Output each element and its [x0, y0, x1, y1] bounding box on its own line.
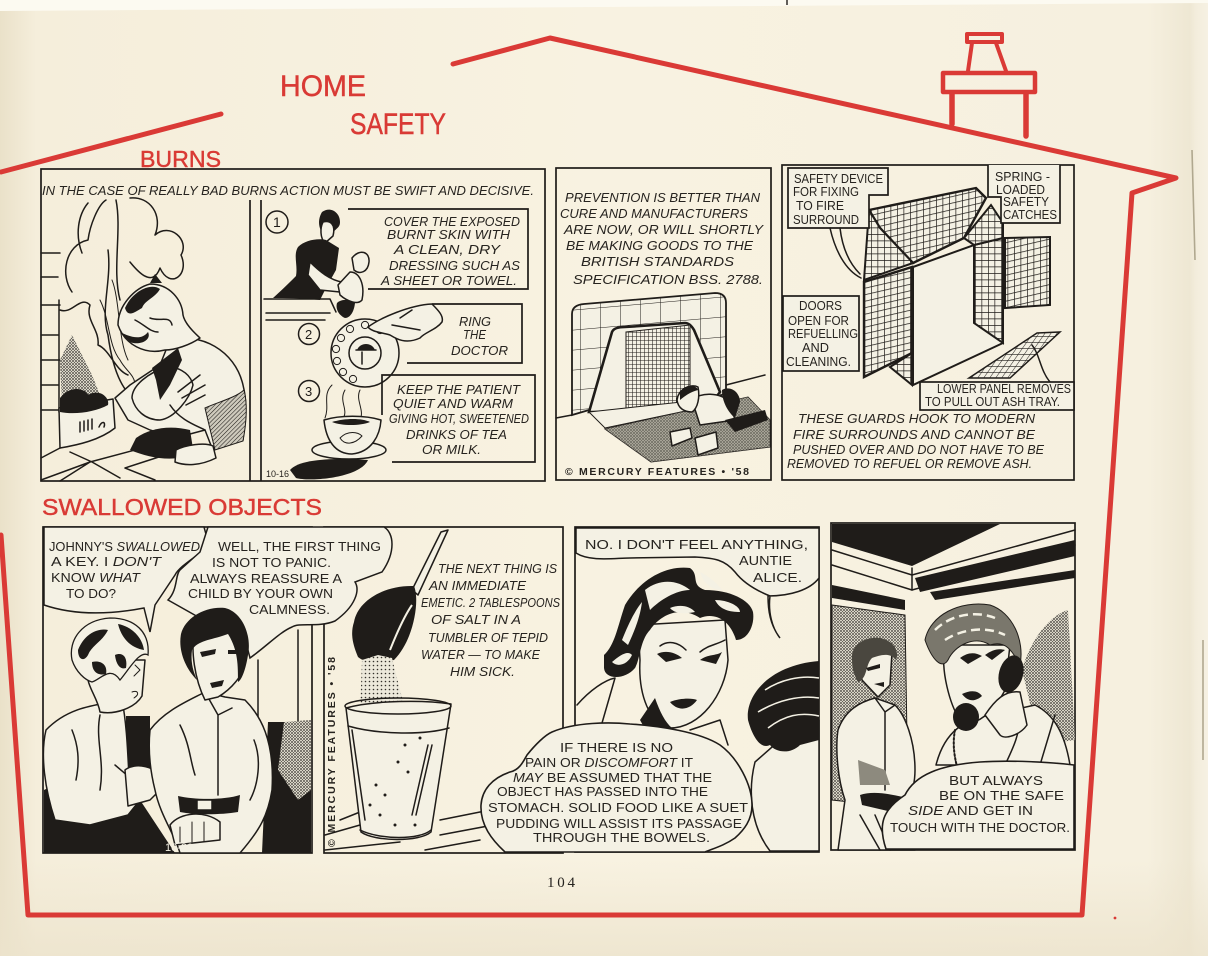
title: home safety [280, 70, 446, 141]
speech bubble: johnny's swallowed: KNOW WHAT [51, 570, 141, 585]
guard description text: FIRE SURROUNDS AND CANNOT BE [793, 427, 1035, 442]
callout: safety device [788, 168, 888, 278]
title: home safety: SAFETY [350, 108, 446, 141]
illustration: carpet and child with toy train [605, 386, 770, 462]
figure: woman with dark hair [149, 608, 272, 853]
speech bubble: well, the first thing: ALWAYS REASSURE A [190, 571, 342, 586]
text: cover the exposed skin: A CLEAN, DRY [393, 242, 502, 257]
callout: spring-loaded catches: LOADED [996, 182, 1045, 197]
speech bubble: but always be on the safe side: SIDE AND GET IN [908, 803, 1033, 818]
comic panel: two women talking [43, 527, 392, 854]
prevention text: BE MAKING GOODS TO THE [566, 238, 753, 253]
guard description text: PUSHED OVER AND DO NOT HAVE TO BE [793, 442, 1044, 457]
speech bubble: no i don't feel anything: AUNTIE [739, 553, 792, 568]
text: immediate emetic: EMETIC. 2 TABLESPOONS [421, 595, 560, 610]
number badge 2 [298, 324, 320, 344]
speech bubble: well, the first thing: IS NOT TO PANIC. [212, 555, 331, 570]
text: immediate emetic [421, 561, 560, 679]
number badge 2: 2 [305, 327, 312, 342]
callout: spring-loaded catches: SPRING - [995, 169, 1050, 184]
text: immediate emetic: WATER — TO MAKE [421, 647, 540, 662]
comic panel: woman telephoning [831, 523, 1075, 850]
callout: doors open [783, 296, 859, 371]
speech bubble: but always be on the safe side: BE ON THE SAFE [939, 788, 1064, 803]
callout: spring-loaded catches: SAFETY [1003, 194, 1049, 209]
text: immediate emetic: OF SALT IN A [431, 612, 521, 627]
number badge 3 [298, 380, 320, 402]
prevention text: PREVENTION IS BETTER THAN [565, 190, 761, 205]
callout: spring-loaded catches: CATCHES [1003, 207, 1057, 222]
illustration: spoon of salt [352, 530, 448, 662]
illustration: falling salt [360, 655, 406, 712]
text: keep the patient warm: QUIET AND WARM [393, 396, 513, 411]
prevention text: BRITISH STANDARDS [581, 254, 734, 269]
number badge 3: 3 [305, 384, 312, 399]
speech bubble: no i don't feel anything: NO. I DON'T FEEL ANYTHING, [585, 537, 808, 552]
callout: doors open: REFUELLING [788, 326, 858, 341]
text: cover the exposed skin: DRESSING SUCH AS [389, 258, 520, 273]
boy body [115, 338, 246, 448]
speech bubble: well, the first thing [168, 527, 392, 658]
text: immediate emetic: AN IMMEDIATE [428, 578, 526, 593]
copyright line vertical: © MERCURY FEATURES • '58 [326, 657, 338, 847]
figure: child seen from behind [748, 661, 819, 851]
speech bubble: johnny's swallowed: TO DO? [66, 586, 116, 601]
panel date: 10-30 [165, 842, 193, 854]
callout: doors open: CLEANING. [786, 354, 851, 369]
heading: swallowed objects: SWALLOWED OBJECTS [42, 494, 322, 520]
callout: lower panel [920, 345, 1074, 410]
text: ring the doctor [407, 304, 522, 363]
illustration: fire surround with guard [556, 293, 765, 428]
text: cover the exposed skin [348, 209, 528, 289]
text: cover the exposed skin: COVER THE EXPOSED [384, 214, 520, 229]
callout: lower panel: LOWER PANEL REMOVES [937, 381, 1071, 396]
comic panel: emetic [324, 527, 563, 853]
speech bubble: no i don't feel anything [576, 528, 819, 638]
text: keep the patient warm [382, 375, 535, 462]
figure: girl looking down [577, 568, 753, 745]
speech bubble: johnny's swallowed: A KEY. I DON'T [51, 554, 162, 569]
dark sofa background [44, 716, 311, 853]
speech bubble: if there is no pain: OBJECT HAS PASSED INTO THE [497, 784, 708, 799]
panel: fire guard diagram [782, 165, 1074, 480]
chimney [943, 34, 1035, 136]
callout: safety device: SURROUND [793, 212, 859, 227]
number badge 1: 1 [273, 214, 281, 230]
illustration: mother and baby [264, 210, 369, 320]
callout: lower panel: TO PULL OUT ASH TRAY. [925, 394, 1060, 409]
text: cover the exposed skin: A SHEET OR TOWEL. [380, 273, 517, 288]
text: ring the doctor: RING [459, 314, 491, 329]
speech bubble: if there is no pain [481, 723, 752, 852]
text: keep the patient warm: DRINKS OF TEA [406, 427, 507, 442]
boy head and hair [118, 284, 200, 351]
table streaks [325, 805, 563, 850]
speech bubble: but always be on the safe side [882, 761, 1074, 849]
panel: prevention [556, 168, 771, 480]
illustration: wire fire guard [864, 188, 1060, 385]
heading: burns: BURNS [140, 146, 221, 172]
strip date: 10-16 [266, 469, 289, 479]
copyright line: © MERCURY FEATURES • '58 [565, 466, 749, 478]
text: cover the exposed skin: BURNT SKIN WITH [387, 227, 511, 242]
speech bubble: if there is no pain: THROUGH THE BOWELS. [533, 830, 710, 845]
patterned wall [832, 605, 908, 803]
prevention text: ARE NOW, OR WILL SHORTLY [563, 222, 764, 237]
guard description text: REMOVED TO REFUEL OR REMOVE ASH. [787, 456, 1032, 471]
speech bubble: if there is no pain: PAIN OR DISCOMFORT IT [525, 755, 693, 770]
prevention text [560, 190, 764, 287]
prevention text: CURE AND MANUFACTURERS [560, 206, 748, 221]
illustration: boy burnt at the fireplace [41, 198, 246, 481]
callout: doors open: AND [802, 340, 829, 355]
illustration: tumbler of water [345, 698, 451, 840]
callout: spring-loaded catches [988, 165, 1060, 223]
text: immediate emetic: HIM SICK. [450, 664, 515, 679]
text: ring the doctor: DOCTOR [451, 343, 508, 358]
speech bubble: well, the first thing: CHILD BY YOUR OWN [188, 586, 333, 601]
speech bubble: but always be on the safe side: TOUCH WITH THE DOCTOR. [890, 820, 1070, 835]
text: immediate emetic: TUMBLER OF TEPID [428, 630, 548, 645]
room ceiling and mouldings [832, 524, 1075, 610]
callout: safety device: TO FIRE [796, 198, 844, 213]
figure: woman with curly hair [43, 618, 168, 825]
speech bubble: but always be on the safe side: BUT ALWAYS [949, 773, 1043, 788]
page number: 104 [547, 875, 576, 891]
speech bubble: if there is no pain: IF THERE IS NO [560, 740, 673, 755]
strip caption: IN THE CASE OF REALLY BAD BURNS ACTION MUST BE SWIFT AND DECISIVE. [42, 183, 534, 198]
figure: woman in background [837, 638, 915, 850]
illustration: telephone dial and hand [331, 304, 442, 387]
speech bubble: if there is no pain: PUDDING WILL ASSIST ITS PASSAGE [496, 816, 742, 831]
speech bubble: if there is no pain: STOMACH. SOLID FOOD LIKE A SUET [488, 800, 748, 815]
speech bubble: well, the first thing: CALMNESS. [249, 602, 330, 617]
title: home safety: HOME [280, 70, 366, 103]
speech bubble: johnny's swallowed: JOHNNY'S SWALLOWED [49, 539, 200, 554]
guard description text: THESE GUARDS HOOK TO MODERN [798, 411, 1036, 426]
text: keep the patient warm: OR MILK. [422, 442, 481, 457]
text: immediate emetic: THE NEXT THING IS [438, 561, 557, 576]
text: ring the doctor: THE [463, 327, 486, 342]
figure: woman on telephone [925, 604, 1070, 770]
comic panel: woman answering [481, 527, 819, 852]
text: keep the patient warm: KEEP THE PATIENT [397, 382, 521, 397]
fire basket [59, 399, 115, 448]
callout: safety device: FOR FIXING [793, 184, 859, 199]
guard description text [787, 411, 1044, 471]
callout: doors open: OPEN FOR [788, 313, 849, 328]
illustration: cup of tea [290, 385, 386, 479]
callout: safety device: SAFETY DEVICE [794, 171, 883, 186]
speech bubble: well, the first thing: WELL, THE FIRST THING [218, 539, 381, 554]
text: keep the patient warm: GIVING HOT, SWEETENED [389, 411, 529, 426]
speech bubble: johnny's swallowed [44, 527, 209, 632]
prevention text: SPECIFICATION BSS. 2788. [573, 272, 763, 287]
number badge 1 [266, 211, 288, 233]
callout: doors open: DOORS [799, 298, 842, 313]
panel: burns treatment strip [41, 169, 545, 481]
speech bubble: no i don't feel anything: ALICE. [753, 570, 802, 585]
speech bubble: if there is no pain: MAY BE ASSUMED THAT THE [513, 770, 712, 785]
